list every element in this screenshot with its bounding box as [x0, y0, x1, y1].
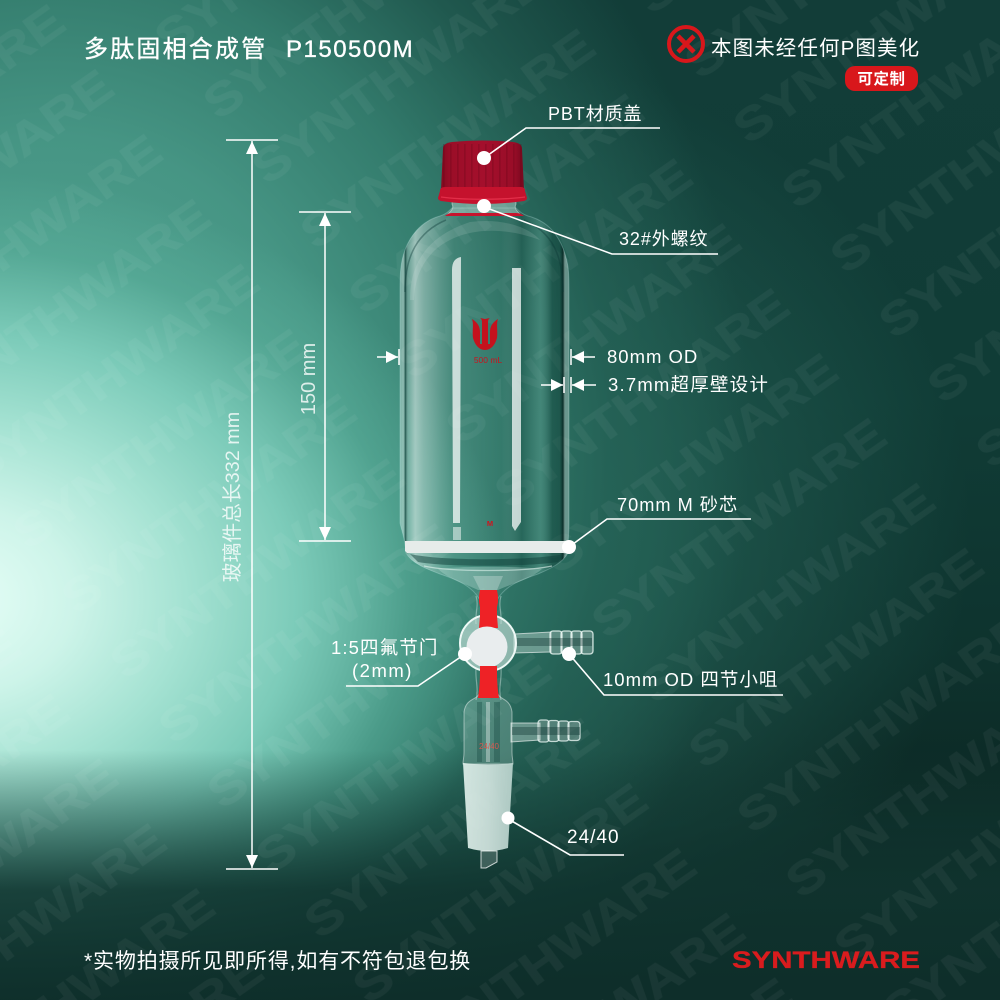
- dimension: body length: [299, 212, 351, 541]
- shoulder wall: [405, 220, 563, 292]
- upper side arm: [514, 631, 593, 654]
- drip tip: [481, 851, 497, 868]
- title: P150500M: [286, 36, 414, 63]
- callout: hose barb: 10mm OD 四节小咀: [603, 669, 778, 690]
- label: total length: 玻璃件总长332 mm: [222, 412, 244, 582]
- label: wall thickness: 3.7mm超厚壁设计: [608, 374, 769, 395]
- callout: hose barb: [562, 647, 783, 695]
- red tube lower: [478, 666, 499, 698]
- tube glass walls: [476, 596, 501, 700]
- red cap: [441, 140, 524, 190]
- glass body: [400, 208, 569, 600]
- callout: frit: [562, 495, 751, 554]
- customisable badge: [845, 66, 918, 91]
- callout: frit: 70mm M 砂芯: [617, 495, 738, 515]
- lower stem: [463, 694, 513, 764]
- stopcock ring: [460, 615, 516, 671]
- dimension arrows: wall thickness: [541, 377, 596, 393]
- brand logo: SYNTHWARE: [732, 947, 920, 974]
- dimension: total length: [226, 140, 278, 869]
- callout: thread: 32#外螺纹: [619, 229, 708, 249]
- callout: thread: [477, 199, 718, 254]
- callout: cap: [477, 104, 660, 165]
- frit mark: M: [487, 519, 493, 528]
- label: outer diameter: 80mm OD: [607, 346, 698, 367]
- glass funnel assembly: [400, 140, 593, 868]
- frosted joint: [463, 763, 513, 851]
- funnel ring: [410, 554, 565, 566]
- red logo: [472, 318, 498, 350]
- callout: stopcock: (2mm): [352, 660, 413, 681]
- callout: cap: PBT材质盖: [548, 104, 642, 124]
- joint mark: 24/40: [479, 742, 500, 751]
- lower side arm: [511, 720, 580, 742]
- callout: stopcock: [331, 637, 472, 686]
- dimension arrows: outer diameter: [377, 349, 595, 365]
- customisable badge: 可定制: [857, 69, 906, 88]
- neck: [448, 200, 520, 214]
- PTFE plug: [466, 626, 508, 668]
- frit disc: [405, 541, 569, 553]
- label: body length: 150 mm: [298, 343, 320, 415]
- title: 多肽固相合成管: [84, 36, 267, 63]
- no retouching note: 本图未经任何P图美化: [711, 37, 920, 60]
- footer note: *实物拍摄所见即所得,如有不符包退包换: [84, 950, 471, 973]
- callout: joint: 24/40: [567, 827, 620, 848]
- volume mark: 500 mL: [474, 355, 502, 365]
- callout: stopcock: 1:5四氟节门: [331, 637, 438, 658]
- icon: no retouching cross: [669, 27, 703, 61]
- callout: joint: [502, 812, 624, 855]
- red tube upper: [479, 590, 498, 628]
- inner highlights: [452, 257, 521, 531]
